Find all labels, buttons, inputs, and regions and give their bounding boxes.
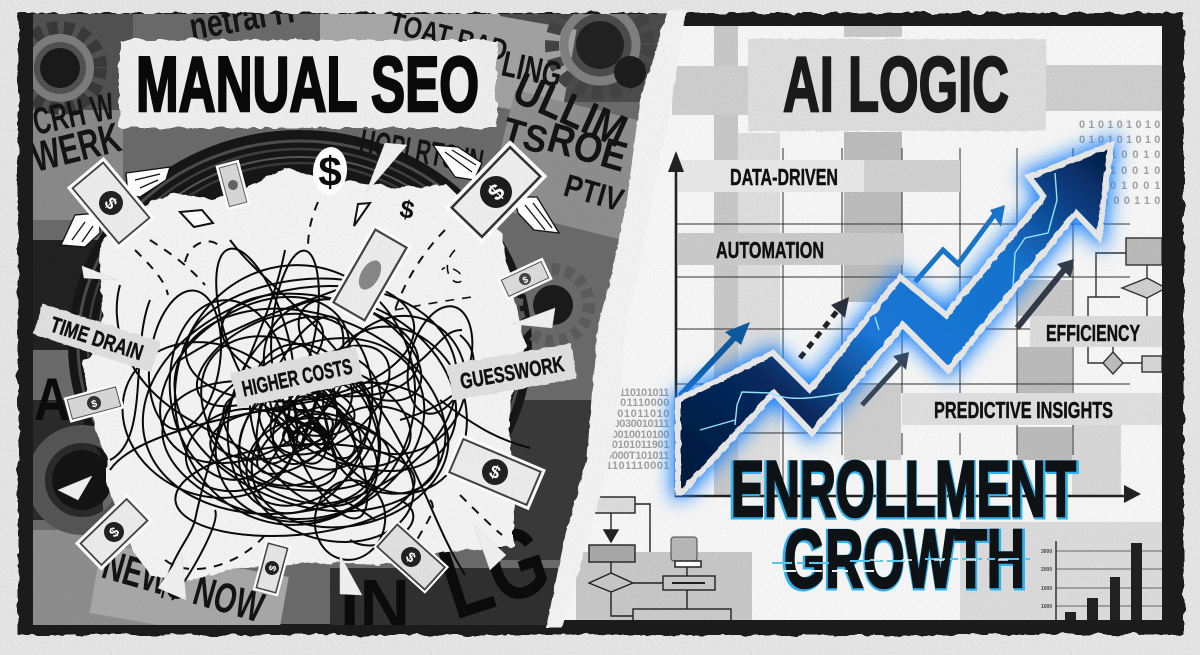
newspaper headlines: LING xyxy=(498,43,566,95)
wing: lower xyxy=(61,213,100,247)
arrow: small blue left xyxy=(680,322,750,396)
outlined shards xyxy=(180,203,370,227)
icon: computer xyxy=(671,537,701,567)
wing: upper xyxy=(433,145,482,180)
newspaper headlines: TOAT RAD xyxy=(386,7,511,68)
newspaper headlines: WERK xyxy=(27,113,126,181)
label: time drain xyxy=(33,304,161,372)
dashed money trails xyxy=(135,202,502,569)
icon: bill right small xyxy=(497,258,553,300)
gear: top right xyxy=(552,0,648,93)
heading: AI logic xyxy=(748,39,1046,131)
flowchart: bottom left xyxy=(589,497,731,623)
binary text: left: 1110101011 xyxy=(614,387,670,399)
chart axes xyxy=(668,151,1141,503)
growth arrow with glow xyxy=(678,145,1111,492)
label: data-driven: DATA-DRIVEN xyxy=(730,164,838,190)
label: higher costs xyxy=(231,346,363,408)
binary text: top right: 010101010 xyxy=(1079,119,1161,131)
label: guesswork: GUESSWORK xyxy=(458,351,566,394)
label: predictive insights: PREDICTIVE INSIGHTS xyxy=(934,397,1113,423)
label: predictive insights xyxy=(902,393,1162,425)
icon: dollar sticker: $ xyxy=(318,148,342,195)
icon: bill right: $ xyxy=(486,461,504,483)
gear: right xyxy=(517,269,589,341)
label: efficiency xyxy=(1030,316,1162,347)
icon: central torn bill xyxy=(328,224,412,326)
newspaper headlines xyxy=(27,0,635,631)
heading: AI logic: AI LOGIC xyxy=(783,40,1009,128)
heading: manual SEO xyxy=(119,40,497,128)
arrow: dashed dark xyxy=(800,297,849,358)
paper shards xyxy=(58,143,555,600)
wing: upper xyxy=(126,167,170,197)
binary text: left: 00030010111 xyxy=(608,418,670,430)
bar chart xyxy=(1041,541,1162,620)
white torn paper xyxy=(83,168,526,582)
newspaper headlines: HOPI RTS IN xyxy=(357,122,486,182)
binary text: top right: 10010 xyxy=(1110,165,1161,177)
wing: lower xyxy=(514,197,559,233)
icon: bill lower left xyxy=(75,493,153,571)
large black collage letters: A xyxy=(34,366,70,433)
binary text: left: D01110000 xyxy=(612,397,670,409)
bill body: $ xyxy=(100,194,121,213)
panel: AI logic chart xyxy=(556,26,1166,623)
newspaper headlines: CRH W xyxy=(29,86,118,144)
dark vortex behind paper xyxy=(68,130,532,464)
newspaper headlines: PTIV xyxy=(560,167,628,218)
label: higher costs: HIGHER COSTS xyxy=(240,354,354,401)
icon: falling bill small top xyxy=(215,160,251,210)
text: growth: GROWTH xyxy=(784,512,1025,605)
torn divider strip xyxy=(546,10,686,628)
icon: bill lower left: $ xyxy=(106,523,123,540)
newspaper headlines: TS xyxy=(498,110,552,163)
icon: bill bottom: $ xyxy=(267,564,280,572)
binary text: left: 10101011901 xyxy=(606,439,670,451)
arrow: dark lower xyxy=(862,352,909,405)
label: automation xyxy=(678,233,904,265)
text: growth xyxy=(782,512,1027,606)
icon: winged bill right xyxy=(433,140,559,244)
bar chart: 3000 xyxy=(1041,549,1052,555)
newspaper headlines: ULLIM xyxy=(506,62,635,157)
label: data-driven xyxy=(678,160,960,192)
bar chart: 2000 xyxy=(1041,567,1052,573)
text: growth: GROWTH xyxy=(782,513,1027,606)
gear: top left xyxy=(20,28,100,108)
heading: enrollment growth xyxy=(729,444,1078,606)
binary text: left: T01011010 xyxy=(610,408,670,420)
binary text: top right: 01001 xyxy=(1110,180,1161,192)
icon: bill bottom xyxy=(253,540,291,596)
chart grid xyxy=(676,148,1130,496)
large black collage letters xyxy=(35,378,547,625)
icon: winged bill left xyxy=(61,157,170,249)
arrow: dark upper right xyxy=(1017,259,1074,328)
panel: manual SEO collage xyxy=(20,0,683,646)
heading: manual SEO: MANUAL SEO xyxy=(136,40,479,128)
icon: bill bottom right xyxy=(373,520,449,594)
icon: bill left small: $ xyxy=(90,398,99,410)
icon: bill left small xyxy=(64,383,124,423)
bar chart: 1000 xyxy=(1041,604,1052,610)
label: efficiency: EFFICIENCY xyxy=(1046,320,1140,346)
binary text: top right: 110010 xyxy=(1100,149,1161,161)
large black collage letters: IN xyxy=(340,565,410,643)
label: guesswork xyxy=(447,343,577,401)
binary text: top right xyxy=(1079,119,1161,207)
newspaper headlines: NEWS NOW xyxy=(98,540,269,631)
newspaper headlines: ROE xyxy=(543,113,632,181)
icon: bill bottom right: $ xyxy=(403,548,419,566)
large black collage letters: LG xyxy=(427,502,562,641)
bar chart: 1000 xyxy=(1041,586,1052,592)
label: time drain: TIME DRAIN xyxy=(47,312,146,365)
binary text: top right: 010101010 xyxy=(1079,134,1161,146)
icon: small dollar: $ xyxy=(397,195,417,225)
icon: bill right xyxy=(444,434,546,510)
binary text: left: 30010010100 xyxy=(606,429,670,441)
binary text: left: 1101110001 xyxy=(606,460,670,472)
grey paper blocks xyxy=(576,26,1162,620)
scribble tangle xyxy=(97,240,530,600)
binary text: left xyxy=(606,387,670,472)
binary text: top right: 100110 xyxy=(1103,195,1161,207)
binary text: left: 0000T101011 xyxy=(606,450,670,462)
icon: bill right small: $ xyxy=(521,274,530,285)
label: automation: AUTOMATION xyxy=(716,237,824,263)
flowchart: top right xyxy=(1088,238,1166,374)
glitch lines xyxy=(772,559,1030,571)
icon: dollar sticker xyxy=(311,146,349,196)
bill body: $ xyxy=(482,178,510,206)
gear: lower left xyxy=(36,434,128,526)
arrow: blue zigzag xyxy=(915,205,1005,282)
